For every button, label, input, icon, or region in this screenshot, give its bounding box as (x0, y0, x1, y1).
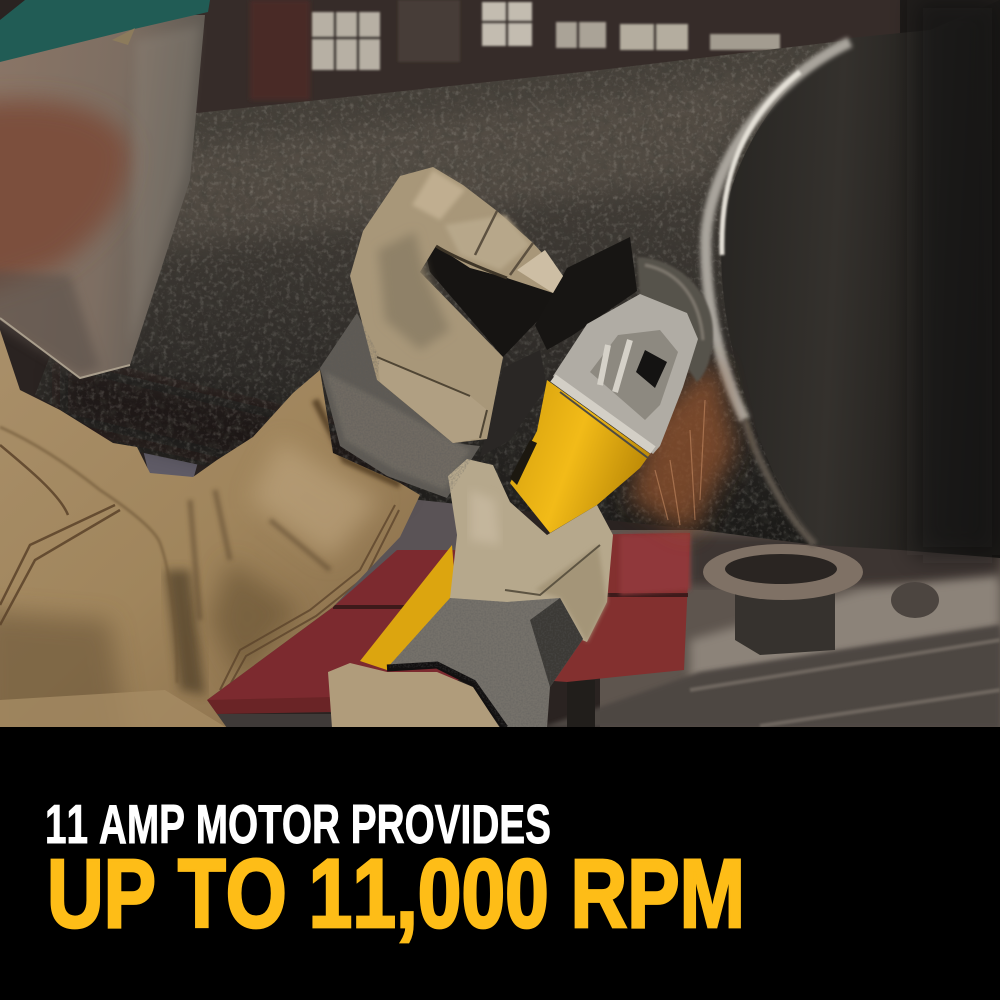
upper glove hand (350, 167, 563, 443)
welder jacket (0, 330, 420, 750)
aluminum gear head (553, 294, 698, 454)
yellow grinder body (360, 294, 698, 670)
steel pipe body (30, 40, 860, 550)
lower glove cuff (387, 598, 583, 728)
wire wheel (637, 257, 713, 382)
gap behind the arm (330, 480, 460, 620)
red table (200, 533, 690, 728)
grinder label (510, 440, 537, 485)
pipe end section (630, 0, 1000, 558)
face shield and helmet (0, 0, 210, 378)
bright weld seam (706, 42, 850, 420)
lower glove hand (448, 459, 613, 642)
upper glove cuff (320, 313, 480, 498)
pedestal (703, 544, 863, 655)
caption panel (0, 727, 1000, 1000)
stitching (0, 445, 120, 625)
body outline shadow (0, 427, 177, 683)
photo: welder grinding a steel pipe (0, 0, 1000, 750)
black grinder handle and guard (423, 237, 637, 457)
welder's third glove segment (328, 663, 500, 728)
cuff weave texture (345, 325, 580, 727)
headline: up to 11,000 rpm: UP TO 11,000 RPM (47, 839, 745, 948)
factory windows (312, 0, 780, 70)
caption line: 11 amp motor provides: 11 AMP MOTOR PROVIDES (45, 793, 551, 855)
lower right machinery (540, 530, 1000, 728)
factory background (0, 0, 1000, 728)
threaded bolt (567, 680, 595, 728)
sparks (630, 360, 735, 535)
torso shadow (165, 570, 205, 695)
